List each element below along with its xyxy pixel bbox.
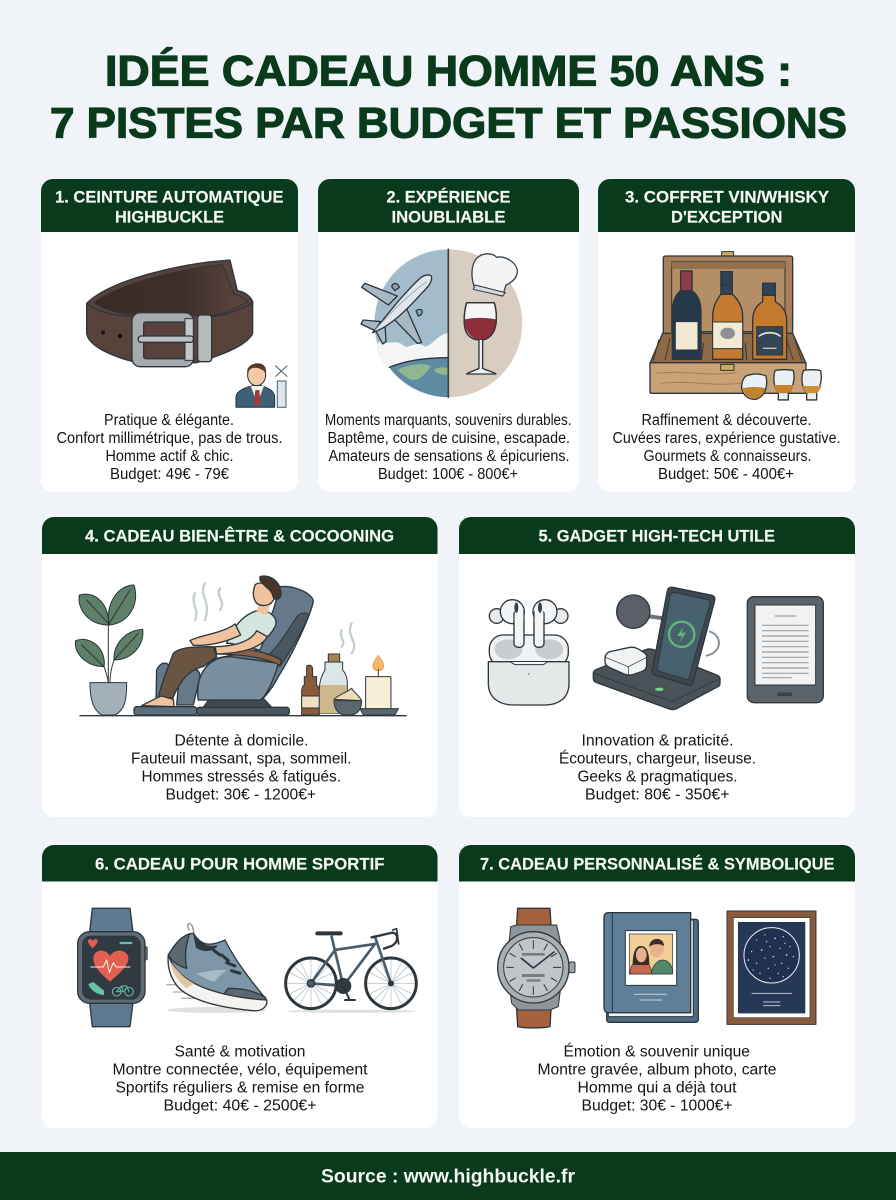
text: personnalisé: Budget: 30€ - 1000€+ — [582, 1098, 732, 1114]
heading: personnalisé — [459, 845, 855, 882]
text: sportif: Montre connectée, vélo, équipement — [112, 1062, 368, 1078]
text: ceinture: Budget: 49€ - 79€ — [110, 466, 229, 483]
heading: ceinture: HIGHBUCKLE — [115, 208, 224, 226]
text: coffret — [612, 412, 840, 483]
panel: homme sportif — [42, 845, 438, 1128]
heading: sportif — [42, 845, 438, 882]
icon: man in massage chair with plant and spa items — [75, 576, 406, 716]
icon: framed star map — [727, 911, 816, 1024]
heading: gadget: 5. GADGET HIGH-TECH UTILE — [538, 528, 775, 546]
heading: expérience: INOUBLIABLE — [392, 208, 506, 226]
text: sportif — [112, 1044, 368, 1114]
text: bien-être: Détente à domicile. — [174, 732, 308, 750]
text: bien-être — [131, 732, 352, 804]
heading: gadget — [459, 517, 855, 554]
heading: bien-être — [42, 517, 438, 554]
text: gadget — [559, 732, 756, 804]
panel: expérience inoubliable — [318, 179, 579, 492]
text: ceinture: Confort millimétrique, pas de trous. — [56, 430, 282, 447]
text: expérience: Moments marquants, souvenirs durables. — [325, 412, 572, 429]
panel: personnalisé et symbolique — [459, 845, 855, 1128]
title — [50, 48, 847, 148]
heading: expérience: 2. EXPÉRIENCE — [386, 188, 510, 206]
text: sportif: Santé & motivation — [174, 1044, 306, 1060]
icon: earbuds — [488, 600, 569, 705]
icon: wooden box with bottles and glasses — [650, 252, 822, 400]
text: gadget: Écouteurs, chargeur, liseuse. — [559, 750, 756, 768]
heading: coffret — [598, 179, 855, 232]
text: sportif: Budget: 40€ - 2500€+ — [164, 1098, 316, 1114]
footer: source — [0, 1152, 896, 1200]
text: ceinture: Homme actif & chic. — [106, 448, 234, 465]
text: coffret: Cuvées rares, expérience gustative. — [612, 430, 840, 447]
text: coffret: Budget: 50€ - 400€+ — [658, 466, 794, 483]
heading: personnalisé: 7. CADEAU PERSONNALISÉ & SYMBOLIQUE — [480, 854, 834, 874]
text: bien-être: Fauteuil massant, spa, sommeil. — [131, 750, 352, 768]
text: personnalisé — [538, 1044, 776, 1114]
heading: ceinture: 1. CEINTURE AUTOMATIQUE — [55, 188, 284, 206]
icon: travel and taste circle — [361, 249, 522, 397]
panel: bien-être et cocooning — [42, 517, 438, 817]
text: expérience — [325, 412, 572, 483]
text: ceinture — [56, 412, 282, 483]
heading: ceinture — [41, 179, 298, 232]
panel: coffret vin et whisky — [598, 179, 855, 492]
text: coffret: Raffinement & découverte. — [642, 412, 812, 429]
panel: gadget high-tech — [459, 517, 855, 817]
icon: belt — [87, 260, 253, 367]
text: coffret: Gourmets & connaisseurs. — [644, 448, 812, 465]
text: personnalisé: Émotion & souvenir unique — [564, 1044, 750, 1060]
heading: coffret: D'EXCEPTION — [671, 208, 782, 226]
text: gadget: Geeks & pragmatiques. — [578, 768, 738, 786]
icon: wireless charger and phone — [593, 587, 720, 710]
text: ceinture: Pratique & élégante. — [104, 412, 234, 429]
text: gadget: Innovation & praticité. — [582, 732, 734, 750]
panel: ceinture automatique — [41, 179, 298, 492]
icon: photo album — [604, 913, 698, 1022]
icon: road bike — [285, 929, 417, 1013]
icon: running shoe — [167, 924, 267, 1013]
footer: source: Source : www.highbuckle.fr — [321, 1166, 576, 1188]
icon: engraved watch — [498, 908, 575, 1028]
text: bien-être: Budget: 30€ - 1200€+ — [166, 786, 316, 804]
text: gadget: Budget: 80€ - 350€+ — [585, 786, 730, 804]
heading: bien-être: 4. CADEAU BIEN-ÊTRE & COCOONING — [85, 526, 394, 546]
heading: expérience — [318, 179, 579, 232]
icon: e-reader — [747, 597, 823, 703]
text: sportif: Sportifs réguliers & remise en forme — [116, 1080, 364, 1096]
text: expérience: Budget: 100€ - 800€+ — [378, 466, 518, 483]
title: IDÉE CADEAU HOMME 50 ANS : — [105, 48, 792, 96]
title: 7 PISTES PAR BUDGET ET PASSIONS — [50, 100, 847, 148]
text: expérience: Amateurs de sensations & épicuriens. — [328, 448, 570, 465]
heading: sportif: 6. CADEAU POUR HOMME SPORTIF — [95, 856, 384, 874]
text: bien-être: Hommes stressés & fatigués. — [142, 768, 341, 786]
icon: man with ruler — [236, 363, 287, 407]
text: expérience: Baptême, cours de cuisine, escapade. — [328, 430, 570, 447]
heading: coffret: 3. COFFRET VIN/WHISKY — [625, 188, 829, 206]
icon: smartwatch — [78, 908, 147, 1027]
text: personnalisé: Homme qui a déjà tout — [578, 1080, 737, 1096]
text: personnalisé: Montre gravée, album photo, carte — [538, 1062, 776, 1078]
